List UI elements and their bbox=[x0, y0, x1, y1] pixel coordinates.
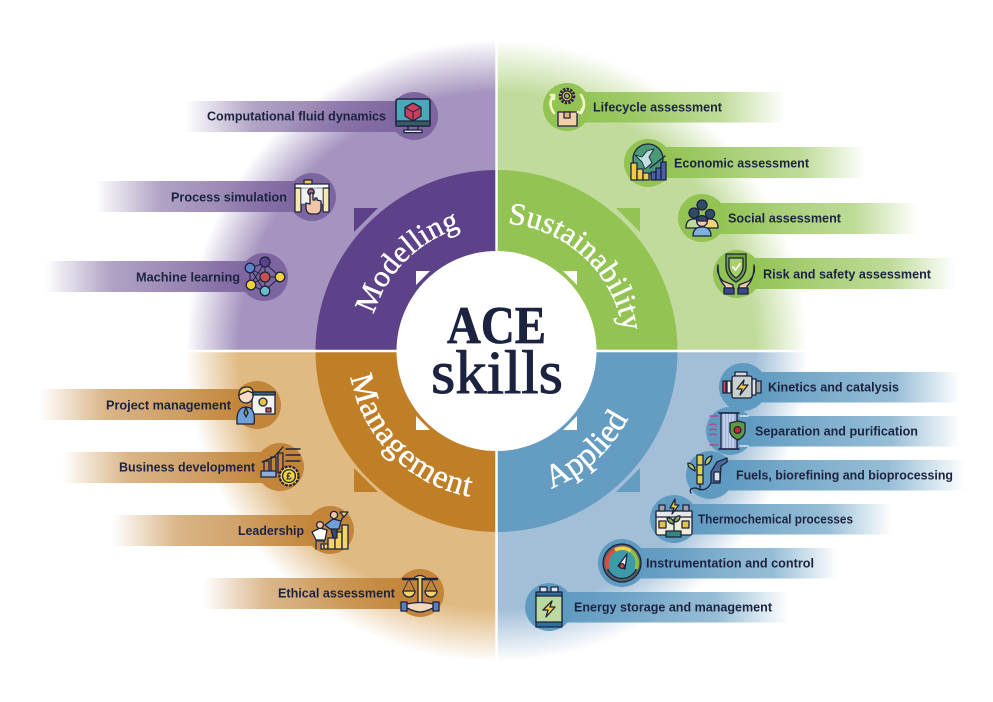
skill: Risk and safety assessment bbox=[713, 250, 955, 298]
skill: Computational fluid dynamics: Computational fluid dynamics bbox=[207, 110, 386, 124]
skill: Thermochemical processes bbox=[650, 495, 892, 543]
skill: Instrumentation and control: Instrumentation and control bbox=[646, 556, 814, 570]
skill: Machine learning bbox=[45, 253, 288, 301]
title: ACE skills: skills bbox=[431, 340, 563, 407]
skill: Machine learning: Machine learning bbox=[136, 270, 240, 284]
icon: growth chart, wrench and pound gear bbox=[261, 447, 300, 486]
skill: Social assessment bbox=[678, 194, 918, 242]
title: ACE skills bbox=[431, 297, 563, 407]
icon: monitor with cube bbox=[396, 99, 430, 133]
skill: Process simulation: Process simulation bbox=[171, 190, 287, 204]
skill: Ethical assessment bbox=[203, 569, 444, 617]
skill: Fuels, biorefining and bioprocessing: Fuels, biorefining and bioprocessing bbox=[736, 468, 953, 482]
skill: Social assessment: Social assessment bbox=[728, 212, 842, 226]
skill: Separation and purification bbox=[706, 407, 960, 455]
centre white circle bbox=[396, 251, 596, 451]
skill: Energy storage and management bbox=[525, 583, 788, 631]
skill: Business development bbox=[62, 443, 304, 491]
ring label: Sustainability: Sustainability bbox=[510, 204, 638, 330]
skill: Economic assessment: Economic assessment bbox=[674, 156, 810, 170]
skill: Ethical assessment: Ethical assessment bbox=[278, 586, 396, 600]
icon: presenter at board bbox=[237, 387, 275, 424]
panel: sustainability backdrop bbox=[496, 40, 808, 351]
title: ACE skills: ACE bbox=[447, 297, 546, 355]
icon: battery with plant bbox=[656, 499, 692, 537]
skill: Lifecycle assessment bbox=[543, 83, 785, 131]
ring label: Applied: Applied bbox=[550, 408, 628, 490]
skill: Risk and safety assessment: Risk and safety assessment bbox=[763, 268, 932, 282]
inner corner triangles bbox=[416, 271, 577, 430]
skill: Economic assessment bbox=[624, 139, 866, 187]
panel: modelling backdrop bbox=[186, 40, 496, 351]
icon: growth chart, wrench and pound gear: £ bbox=[286, 472, 292, 482]
icon: globe, coins, chart bbox=[631, 144, 666, 180]
skill: Fuels, biorefining and bioprocessing bbox=[686, 451, 965, 499]
skill: Separation and purification: Separation and purification bbox=[755, 424, 918, 438]
icon: neural network bbox=[245, 257, 285, 296]
skill: Process simulation bbox=[95, 173, 336, 221]
skill: Project management bbox=[40, 381, 281, 429]
ring segment: modelling bbox=[316, 170, 496, 351]
skill: Computational fluid dynamics bbox=[185, 92, 438, 140]
icon: group of people bbox=[686, 200, 718, 236]
icon: bamboo and fuel nozzle bbox=[688, 455, 727, 493]
icon: engine bbox=[723, 372, 761, 398]
skill: Project management: Project management bbox=[106, 398, 232, 412]
icon: figures climbing steps bbox=[312, 511, 348, 549]
icon: gauge bbox=[603, 544, 641, 582]
ring segment: sustainability bbox=[496, 170, 678, 351]
skill: Energy storage and management: Energy storage and management bbox=[574, 600, 773, 614]
skill: Thermochemical processes: Thermochemical processes bbox=[698, 512, 853, 526]
skill: Lifecycle assessment: Lifecycle assessment bbox=[593, 100, 723, 114]
panel: management backdrop bbox=[186, 351, 496, 662]
icon: hands with shield bbox=[718, 254, 754, 294]
outer corner triangles bbox=[354, 208, 640, 492]
icon: separation column bbox=[710, 413, 748, 449]
ring label: Management: Management bbox=[350, 372, 472, 497]
ring segment: management bbox=[316, 351, 496, 532]
skill: Leadership bbox=[112, 506, 354, 554]
icon: touch screen bbox=[295, 180, 329, 214]
icon: battery bbox=[536, 587, 562, 627]
icon: lifecycle gear and box bbox=[550, 89, 584, 126]
ring label: Modelling: Modelling bbox=[354, 214, 460, 314]
ring segment: applied bbox=[496, 351, 678, 532]
skill: Kinetics and catalysis: Kinetics and catalysis bbox=[768, 380, 899, 394]
skill: Business development: Business development bbox=[119, 460, 256, 474]
skill: Instrumentation and control bbox=[598, 539, 838, 587]
icon: scales and handshake bbox=[401, 576, 439, 612]
skill: Leadership: Leadership bbox=[238, 524, 304, 538]
quadrant dividers bbox=[170, 20, 825, 680]
skill: Kinetics and catalysis bbox=[719, 363, 960, 411]
panel: applied backdrop bbox=[496, 351, 808, 662]
